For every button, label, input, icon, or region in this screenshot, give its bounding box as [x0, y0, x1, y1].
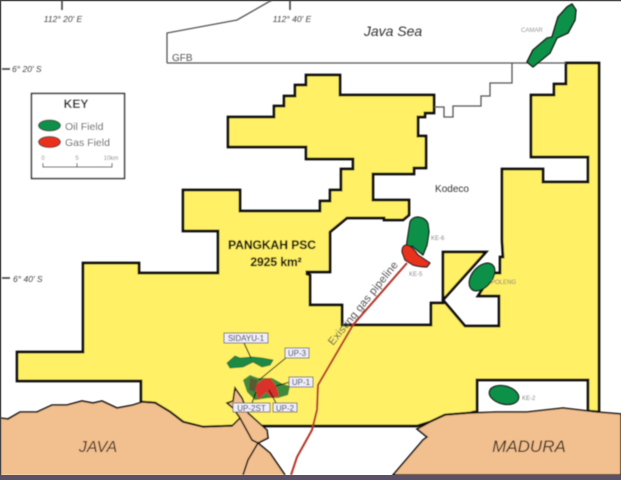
- gas field: KE-5: [402, 245, 430, 267]
- label: UP-2: [273, 403, 297, 413]
- coordinate: 112 40 E: 112° 40' E: [273, 14, 312, 24]
- label: Java Sea: Java Sea: [363, 23, 422, 39]
- label: KE-2: KE-2: [522, 396, 536, 402]
- land: Madura: [393, 408, 621, 475]
- label leader lines: [244, 343, 290, 403]
- oil and gas field: UP: [243, 375, 290, 400]
- coordinate: 6 20 S: 6° 20' S: [12, 64, 42, 74]
- label: UP-2ST: UP-2ST: [237, 404, 266, 413]
- legend swatch: oil: [38, 120, 60, 131]
- scale bar: [41, 156, 118, 167]
- panel: key: [32, 94, 124, 178]
- label: GFB: GFB: [172, 53, 193, 64]
- GFB boundary line: [167, 0, 566, 117]
- oil field: Poleng: [464, 258, 500, 296]
- label: KE-6: KE-6: [431, 236, 445, 242]
- oil field: KE-6: [406, 217, 429, 255]
- scale bar: 0: [41, 156, 45, 162]
- legend label: gas: Gas Field: [65, 137, 110, 149]
- coordinate: 112 20 E: 112° 20' E: [44, 14, 83, 24]
- label: UP-1: [289, 377, 313, 387]
- label: UP-1: UP-1: [292, 378, 311, 387]
- coordinate: 6 40 S: 6° 40' S: [13, 274, 43, 284]
- panel: Pangkah PSC block: [17, 63, 599, 427]
- label: Kodeco: Kodeco: [435, 184, 469, 195]
- coordinate: 112 40 E: [273, 0, 312, 24]
- gas pipeline: [291, 263, 407, 475]
- label: KE-5: KE-5: [409, 272, 423, 278]
- legend label: oil: Oil Field: [65, 121, 104, 133]
- label: pipeline: Existing gas pipeline: [326, 260, 401, 348]
- area: 2925 km2: 2925 km²: [250, 255, 302, 269]
- legend swatch: gas: [38, 136, 60, 148]
- label: UP-2: UP-2: [276, 404, 295, 413]
- label: MADURA: MADURA: [492, 437, 566, 456]
- land: Java: [0, 388, 285, 475]
- coordinate: 112 20 E: [44, 0, 83, 24]
- label: JAVA: JAVA: [78, 439, 117, 456]
- label: UP-3: UP-3: [288, 349, 307, 358]
- label: UP-2ST: [233, 403, 270, 413]
- label: UP-3: [285, 348, 309, 358]
- title: Pangkah PSC: PANGKAH PSC: [228, 238, 316, 252]
- scale bar: 10km: [104, 156, 118, 162]
- heading: KEY: KEY: [64, 97, 88, 111]
- label: SIDAYU-1: SIDAYU-1: [228, 334, 265, 343]
- Java coastline: [0, 388, 285, 475]
- bottom band: [0, 475, 621, 480]
- scale bar: 5: [75, 156, 79, 162]
- oil field: KE-2: [487, 383, 521, 407]
- label: Poleng: POLENG: [491, 280, 516, 286]
- oil field: Camar: [527, 4, 576, 67]
- oil field: Sidayu: [227, 356, 273, 368]
- label: CAMAR: CAMAR: [521, 28, 543, 34]
